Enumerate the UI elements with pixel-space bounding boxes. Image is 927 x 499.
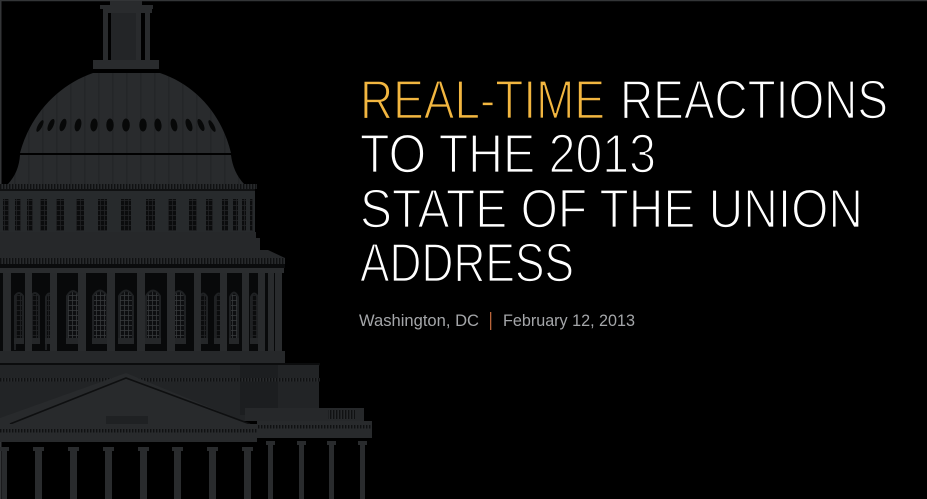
upper windows	[3, 199, 253, 231]
window sills	[14, 338, 259, 344]
subtitle: location and date	[359, 312, 635, 330]
subtitle: location and date: Washington, DC	[359, 312, 479, 330]
lower entablature	[0, 421, 372, 442]
drum	[8, 155, 244, 184]
dome	[20, 73, 231, 153]
title line 2: TO THE 2013	[360, 122, 656, 184]
balustrade	[245, 408, 364, 421]
main cornice	[0, 258, 285, 351]
illustration: Capitol building	[0, 1, 372, 499]
colonnade	[3, 273, 282, 351]
title line 1: REAL-TIME	[360, 68, 605, 130]
title line 1	[360, 68, 888, 130]
arched windows	[15, 290, 258, 350]
lower wall	[0, 351, 320, 421]
upper wall	[0, 232, 285, 258]
pediment	[0, 373, 250, 426]
upper cornice	[0, 184, 257, 232]
lantern	[93, 1, 159, 69]
title	[360, 68, 888, 294]
lower colonnade	[0, 441, 367, 499]
title line 4: ADDRESS	[360, 232, 574, 294]
title line 3: STATE OF THE UNION	[360, 178, 863, 240]
dome windows	[35, 118, 217, 133]
subtitle: location and date: February 12, 2013	[503, 312, 635, 330]
